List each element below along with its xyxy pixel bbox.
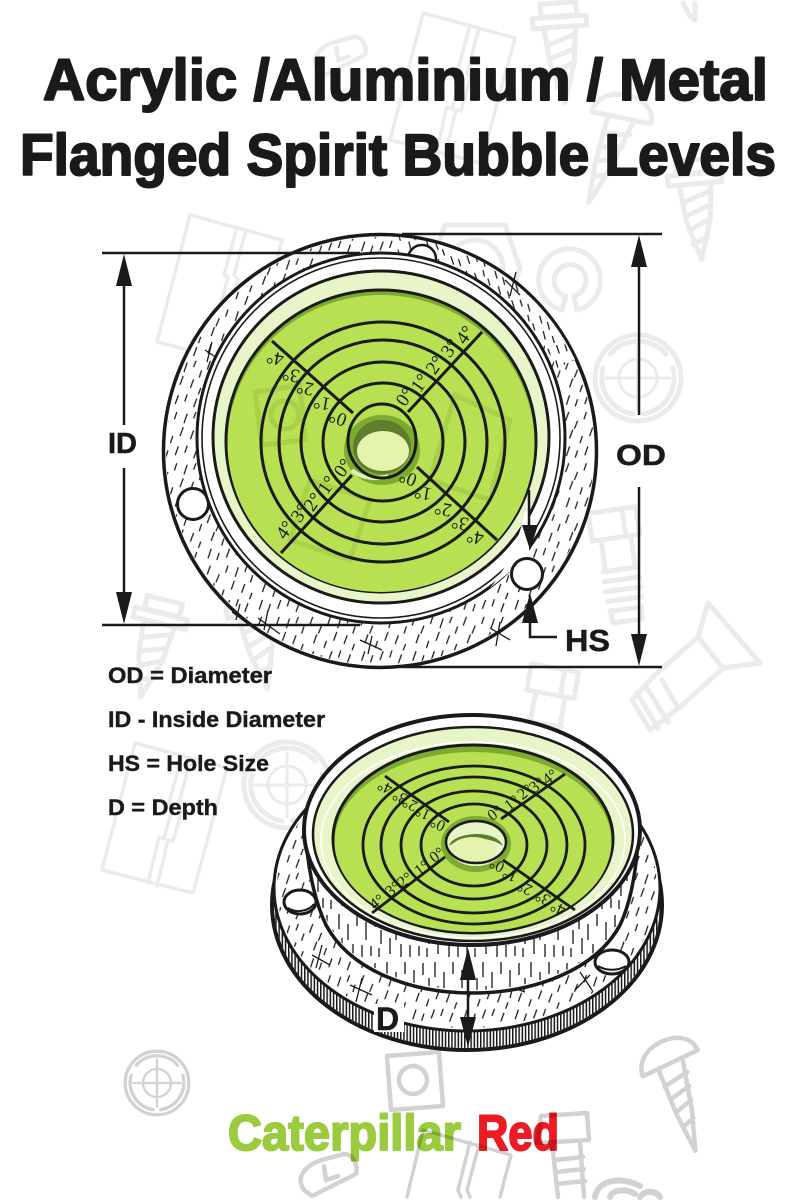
bubble vial [441, 816, 511, 872]
faint icons through glass [255, 385, 510, 560]
degree labels: 4° [375, 776, 395, 797]
bubble vial [344, 404, 420, 485]
degree labels: 3° [437, 335, 464, 361]
logo: Caterpillar Red: Red [477, 1105, 559, 1161]
mounting hole top [408, 245, 436, 273]
degree labels: 1° [501, 792, 523, 815]
dimension ID [102, 253, 360, 625]
degree labels: 1° [312, 391, 332, 414]
dimension HS [522, 490, 610, 658]
scale rings [261, 322, 505, 562]
degree labels: 3° [287, 500, 314, 526]
degree labels: 1° [314, 472, 341, 498]
degree labels: 0° [484, 802, 506, 825]
green liquid [226, 290, 536, 592]
degree labels: 0° [428, 813, 448, 834]
degree labels: 3° [382, 878, 404, 901]
glass rim [213, 271, 549, 603]
dimension ID: ID [108, 428, 137, 460]
degree labels: 0° [330, 455, 357, 481]
legend: D = Depth [108, 795, 218, 820]
top view bubble level [110, 0, 596, 668]
white wedge beside hole [490, 490, 529, 588]
dimension D [374, 948, 476, 1047]
cylinder body [306, 830, 638, 993]
flange top surface [274, 745, 660, 1031]
degree labels: 2° [422, 352, 449, 378]
degree labels: 4° [539, 766, 561, 789]
cross lines [272, 332, 497, 553]
title: Acrylic /Aluminium / Metal [43, 48, 768, 113]
mounting hole right [512, 558, 542, 590]
scale rings [363, 766, 585, 924]
degree labels: 2° [394, 869, 416, 892]
background: faint hardware icon pattern [102, 1, 760, 893]
legend: HS = Hole Size [108, 751, 269, 776]
degree labels: 2° [400, 793, 420, 814]
degree labels: 2° [514, 781, 536, 804]
dimension OD [402, 234, 666, 667]
degree labels: 4° [366, 891, 388, 914]
degree labels: 4° [465, 525, 485, 548]
legend: ID - Inside Diameter [108, 707, 325, 732]
degree labels: 4° [452, 322, 479, 348]
degree labels: 2° [433, 497, 453, 520]
dimension HS: HS [565, 623, 610, 658]
title: Flanged Spirit Bubble Levels [20, 123, 776, 188]
outer flange [164, 234, 596, 668]
degree labels: 3° [390, 786, 410, 807]
perspective view bubble level [272, 715, 662, 1050]
degree labels: 3° [533, 887, 553, 908]
title [20, 48, 776, 188]
degree labels: 1° [413, 802, 433, 823]
degree labels: 1° [500, 864, 520, 885]
degree labels: 1° [407, 370, 434, 396]
degree labels: 3° [526, 774, 548, 797]
cross lines [372, 774, 575, 913]
mounting hole left [178, 488, 208, 520]
logo: Caterpillar Red: Caterpillar [228, 1105, 461, 1161]
flange edge ticks [274, 762, 660, 1048]
degree labels: 3° [281, 363, 301, 386]
flange hatching [110, 0, 594, 665]
degree labels [265, 322, 485, 548]
degree labels: 0° [426, 844, 448, 867]
dimension D: D [376, 1001, 399, 1037]
degree labels [366, 766, 568, 918]
flange underside [272, 760, 662, 1050]
degree labels: 0° [487, 854, 507, 875]
inner housing rings [197, 253, 565, 623]
glass rims [304, 715, 640, 945]
degree labels: 2° [515, 877, 535, 898]
degree labels: 0° [397, 465, 420, 490]
flange hatching [277, 748, 657, 1028]
degree labels: 4° [265, 346, 285, 369]
cylinder hatching [309, 830, 635, 990]
legend: OD = Diameter [108, 663, 272, 688]
degree labels: 3° [450, 511, 470, 534]
degree labels: 2° [295, 376, 315, 399]
degree labels: 0° [327, 405, 350, 430]
dimension OD: OD [616, 440, 666, 472]
degree labels: 2° [300, 489, 327, 515]
degree labels: 1° [411, 857, 433, 880]
degree labels: 0° [392, 384, 419, 410]
background: hardware icons at the bottom [125, 1032, 724, 1197]
degree labels: 1° [413, 481, 433, 504]
mounting holes [284, 890, 629, 974]
degree labels: 4° [272, 517, 299, 543]
legend [108, 663, 325, 820]
green liquid [333, 745, 613, 933]
degree labels: 4° [548, 897, 568, 918]
